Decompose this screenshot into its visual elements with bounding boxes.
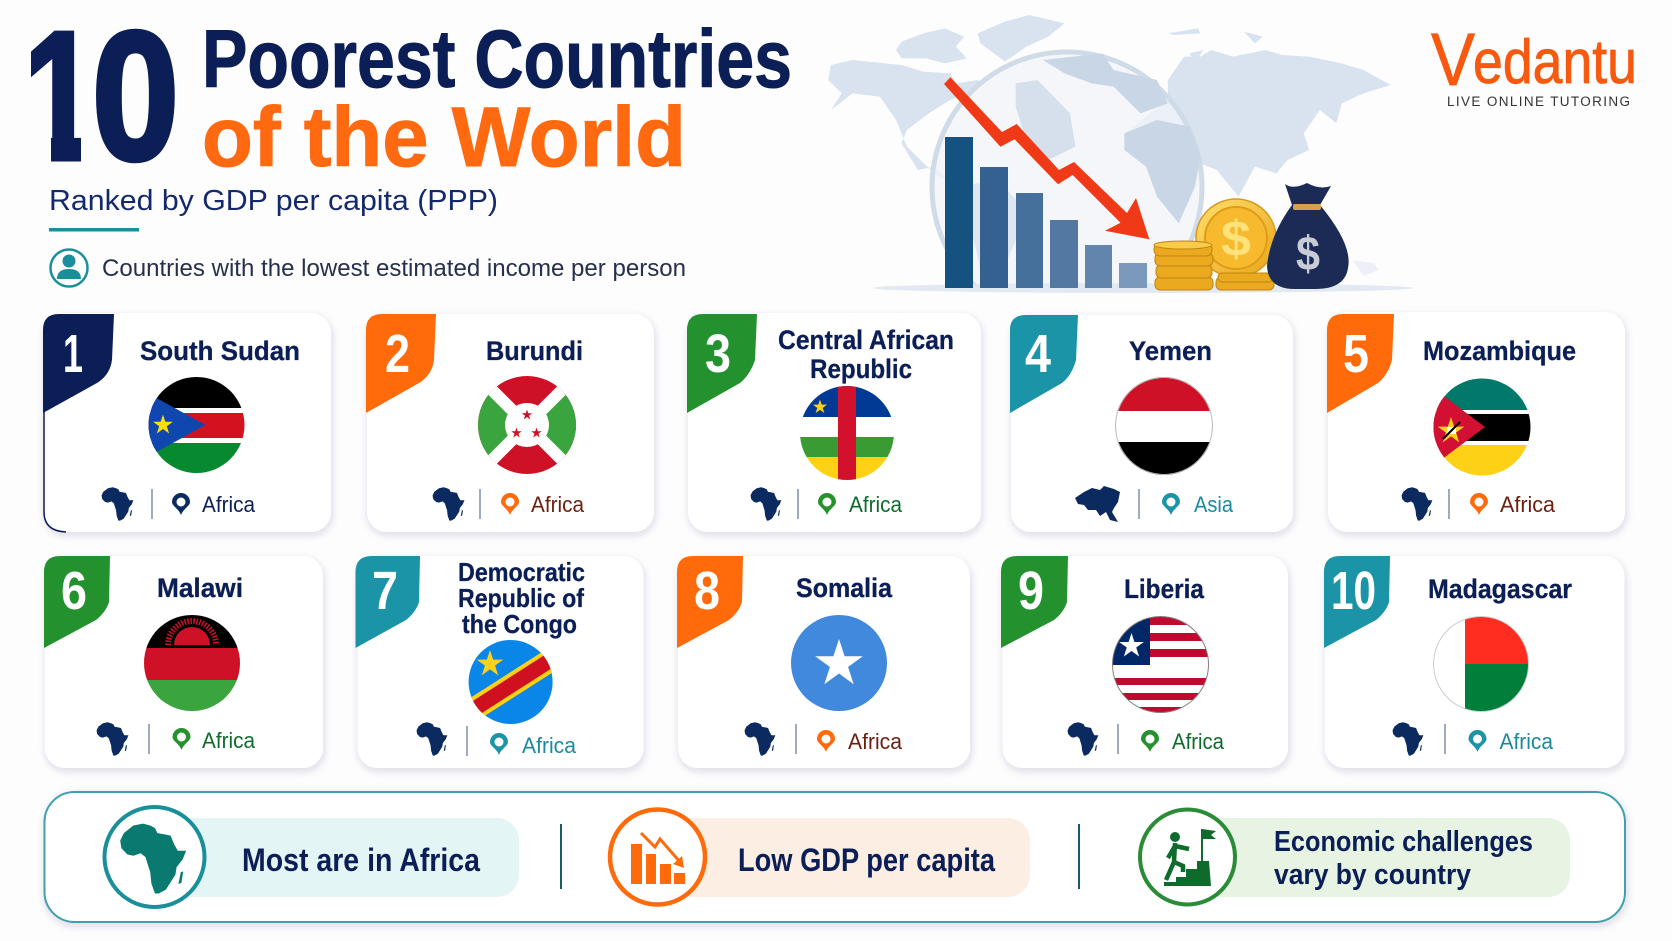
location pin [172, 493, 190, 515]
region label: Africa [531, 492, 585, 517]
flag: Mozambique [1433, 378, 1531, 477]
country name: Republic [810, 354, 912, 384]
continent icon [417, 722, 447, 756]
flag: Yemen [1114, 376, 1214, 476]
flag: Malawi [144, 615, 240, 711]
country name: Somalia [796, 573, 893, 603]
card 10: Madagascar [1324, 556, 1624, 768]
rank badge 3 [687, 314, 757, 413]
title block [10, 0, 792, 198]
icon: person in circle [50, 250, 88, 286]
takeaway text: Low GDP per capita [738, 842, 995, 878]
subtitle accent line [49, 228, 139, 232]
logo tagline: LIVE ONLINE TUTORING [1447, 94, 1630, 109]
rank number 1: 1 [63, 324, 83, 384]
takeaway: low GDP per capita [610, 810, 1030, 904]
rank number 9: 9 [1018, 561, 1044, 621]
money bag [1267, 183, 1349, 289]
flag: Somalia [791, 615, 887, 711]
takeaway: most are in Africa [104, 807, 519, 907]
location pin [818, 493, 836, 515]
flag: South Sudan [140, 377, 245, 473]
card 5: Mozambique [1327, 312, 1625, 532]
logo wordmark: V [1431, 18, 1476, 101]
rank number 10: 10 [1331, 561, 1376, 621]
country name: Burundi [486, 336, 583, 366]
icon: Africa map [120, 824, 186, 894]
world map [828, 15, 1391, 276]
country name [778, 325, 954, 384]
continent icon [97, 722, 128, 756]
hero illustration [828, 15, 1413, 322]
country name: Malawi [157, 573, 243, 603]
rank number 3: 3 [705, 324, 731, 384]
rank number 7: 7 [372, 561, 398, 621]
country name: Central African [778, 325, 954, 355]
money bag: $ [1296, 228, 1320, 281]
country name: Yemen [1129, 336, 1212, 366]
flag: Madagascar [1465, 617, 1528, 711]
title line 1: Poorest Countries [202, 14, 792, 105]
rank badge 7 [356, 556, 420, 648]
coin stack right [1216, 273, 1274, 290]
card 6: Malawi [44, 556, 323, 768]
region label: Africa [848, 729, 903, 754]
region label: Africa [849, 492, 903, 517]
icon: person climbing steps to flag [1164, 829, 1216, 886]
card 2: Burundi [366, 314, 654, 532]
rank badge 4 [1010, 315, 1078, 413]
red down arrow [944, 77, 1149, 239]
rank badge 2 [366, 314, 436, 413]
coin stack left [1154, 241, 1213, 290]
logo wordmark [1431, 18, 1637, 101]
icon: falling bars [631, 833, 685, 884]
location pin [1162, 493, 1180, 515]
large gold coin: $ [1221, 211, 1251, 267]
rank badge 10 [1324, 556, 1390, 648]
globe [930, 50, 1204, 284]
card 9: Liberia [1001, 556, 1288, 768]
logo wordmark: edantu [1473, 28, 1637, 97]
continent icon [1393, 722, 1423, 756]
country name: Mozambique [1423, 336, 1576, 366]
description text: Countries with the lowest estimated income per person [102, 255, 686, 282]
bar chart [945, 137, 1147, 288]
region label: Africa [1500, 492, 1556, 517]
region label: Africa [202, 492, 256, 517]
country name: the Congo [462, 609, 577, 639]
title number 10 [10, 0, 179, 198]
country name: Madagascar [1428, 574, 1572, 604]
continent icon: Asia [1075, 486, 1120, 522]
card 8: Somalia [677, 556, 970, 768]
rank badge 8 [677, 556, 743, 648]
continent icon [745, 722, 775, 756]
continent icon [433, 487, 464, 521]
country name [458, 557, 585, 639]
country name: Republic of [458, 583, 584, 613]
takeaway: economic challenges [1140, 810, 1570, 904]
rank number 2: 2 [385, 324, 410, 384]
rank number 6: 6 [61, 561, 87, 621]
continent icon [1402, 487, 1432, 521]
flag: Liberia [1112, 616, 1209, 715]
takeaway text: Economic challenges [1274, 826, 1533, 858]
country name: Democratic [458, 557, 585, 587]
subtitle: Ranked by GDP per capita (PPP) [49, 185, 498, 217]
card 1: South Sudan [43, 313, 331, 532]
card 7: Democratic Republic of the Congo [356, 556, 644, 768]
location pin [490, 733, 508, 755]
location pin [1468, 730, 1486, 752]
flag: DR Congo [468, 640, 557, 724]
flag: Burundi [478, 376, 576, 474]
country name: Liberia [1124, 574, 1205, 604]
takeaway text: vary by country [1274, 859, 1471, 891]
takeaway text [1274, 826, 1533, 891]
region label: Africa [1500, 729, 1554, 754]
rank badge 1 [43, 314, 114, 413]
takeaway text: Most are in Africa [242, 842, 480, 878]
country name: South Sudan [140, 336, 300, 366]
location pin [1470, 493, 1488, 515]
rank badge 5 [1327, 314, 1394, 413]
title line 2: of the World [202, 90, 686, 184]
continent icon [751, 487, 781, 521]
region label: Africa [522, 733, 577, 758]
rank number 4: 4 [1025, 324, 1051, 384]
location pin [817, 730, 835, 752]
logo [1431, 18, 1637, 109]
rank number 8: 8 [694, 561, 720, 621]
panel: key takeaways [44, 792, 1625, 922]
region label: Africa [1172, 729, 1225, 754]
location pin [172, 728, 190, 750]
flag: Central African Republic [800, 386, 894, 481]
rank number 5: 5 [1343, 324, 1369, 384]
location pin [1141, 730, 1159, 752]
large gold coin [1196, 199, 1276, 277]
region label: Africa [202, 728, 256, 753]
continent icon [1068, 722, 1098, 756]
ground shadow [873, 283, 1413, 293]
region label: Asia [1194, 492, 1234, 517]
rank badge 9 [1001, 556, 1068, 648]
location pin [501, 493, 519, 515]
card 4: Yemen [1010, 315, 1293, 532]
continent icon [102, 487, 133, 521]
card 3: Central African Republic [687, 313, 981, 532]
rank badge 6 [44, 556, 110, 648]
